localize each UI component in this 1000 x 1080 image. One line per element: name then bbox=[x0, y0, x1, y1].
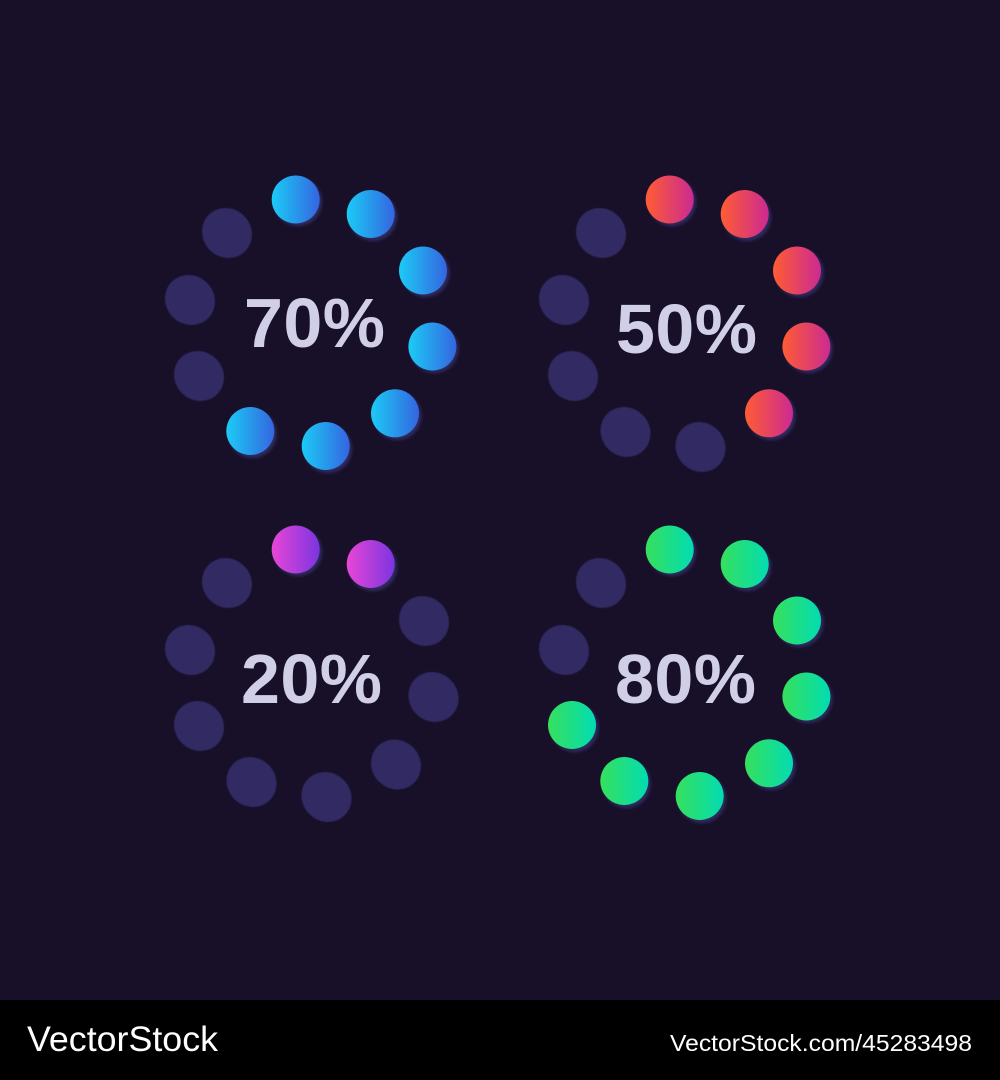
footer bar bbox=[0, 1000, 1000, 1080]
chart: 20% purple ring bbox=[155, 526, 469, 832]
inactive dots bbox=[529, 548, 636, 685]
inactive dots bbox=[529, 198, 736, 482]
footer logo text: VectorStock bbox=[27, 1020, 219, 1059]
percentage label: 80% bbox=[615, 640, 756, 718]
active dots bbox=[226, 176, 458, 473]
inactive dots bbox=[155, 198, 262, 411]
active dots bbox=[646, 176, 832, 440]
footer image id text: VectorStock.com/45283498 bbox=[670, 1030, 972, 1056]
percentage label: 70% bbox=[244, 284, 385, 362]
chart: 70% blue ring bbox=[155, 176, 459, 473]
percentage label: 50% bbox=[616, 290, 757, 368]
chart: 80% green ring bbox=[529, 526, 832, 823]
chart: 50% red ring bbox=[529, 176, 832, 482]
active dots bbox=[548, 526, 832, 823]
inactive dots bbox=[155, 548, 469, 832]
active dots bbox=[272, 526, 397, 591]
percentage label: 20% bbox=[241, 640, 382, 718]
